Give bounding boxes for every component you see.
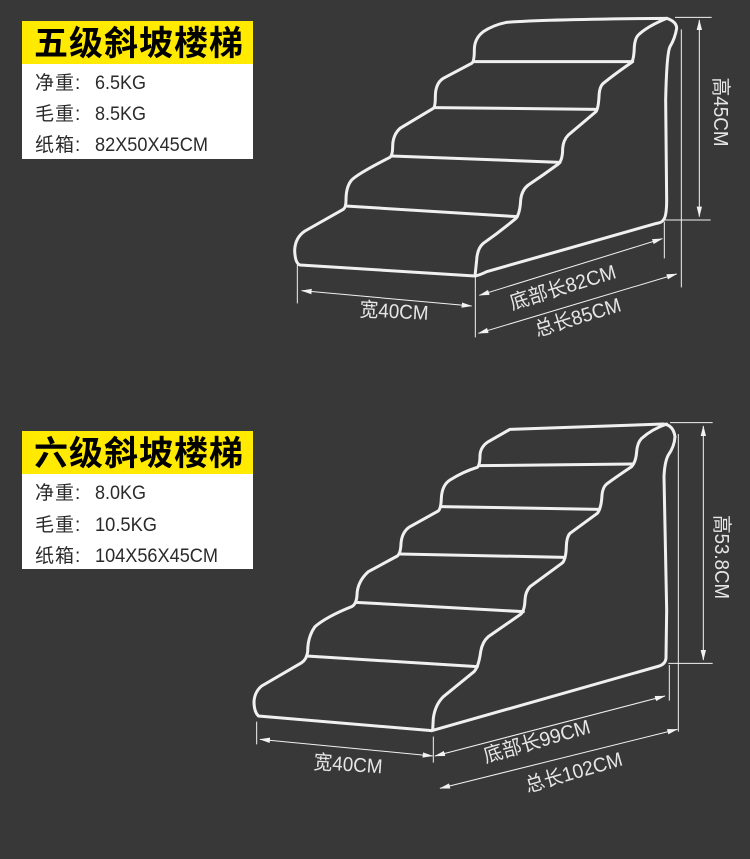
diagram: five-step stairs outline bbox=[295, 18, 677, 276]
carton size row: 104X56X45CM bbox=[95, 546, 218, 567]
label: height 53.8CM: 高53.8CM bbox=[710, 515, 733, 599]
net weight row bbox=[35, 72, 146, 94]
heading: six-step ramp stairs: 六级斜坡楼梯 bbox=[34, 435, 243, 473]
net weight row: 6.5KG bbox=[95, 73, 146, 94]
label: total length 85CM: 总长85CM bbox=[532, 294, 624, 342]
gross weight row: 8.5KG bbox=[95, 104, 146, 125]
gross weight row: 毛重: bbox=[35, 103, 81, 125]
gross weight row bbox=[35, 103, 146, 125]
label: width 40CM: 宽40CM bbox=[313, 751, 383, 778]
carton size row: 82X50X45CM bbox=[95, 135, 208, 156]
carton size row: 纸箱: bbox=[35, 545, 81, 567]
dimension lines: five-step stairs bbox=[297, 17, 712, 337]
gross weight row bbox=[35, 514, 157, 536]
gross weight row: 毛重: bbox=[35, 514, 81, 536]
diagram: six-step stairs outline bbox=[254, 424, 675, 731]
carton size row bbox=[35, 134, 208, 156]
carton size row: 纸箱: bbox=[35, 134, 81, 156]
gross weight row: 10.5KG bbox=[95, 515, 157, 536]
net weight row: 净重: bbox=[35, 72, 81, 94]
carton size row bbox=[35, 545, 218, 567]
label: width 40CM: 宽40CM bbox=[359, 298, 429, 325]
card white body bbox=[22, 64, 253, 159]
net weight row: 净重: bbox=[35, 482, 81, 504]
label: height 45CM: 高45CM bbox=[709, 78, 732, 146]
label: base length 82CM: 底部长82CM bbox=[507, 260, 619, 315]
dimension lines: six-step stairs bbox=[257, 423, 713, 788]
label: total length 102CM: 总长102CM bbox=[523, 748, 625, 797]
panel: five-step spec card bbox=[22, 21, 253, 159]
label: base length 99CM: 底部长99CM bbox=[481, 715, 593, 768]
net weight row: 8.0KG bbox=[95, 483, 146, 504]
card yellow header bbox=[22, 431, 253, 474]
heading: five-step ramp stairs: 五级斜坡楼梯 bbox=[34, 25, 243, 63]
panel: six-step spec card bbox=[22, 431, 253, 569]
net weight row bbox=[35, 482, 146, 504]
card white body bbox=[22, 474, 253, 569]
card yellow header bbox=[22, 21, 253, 64]
